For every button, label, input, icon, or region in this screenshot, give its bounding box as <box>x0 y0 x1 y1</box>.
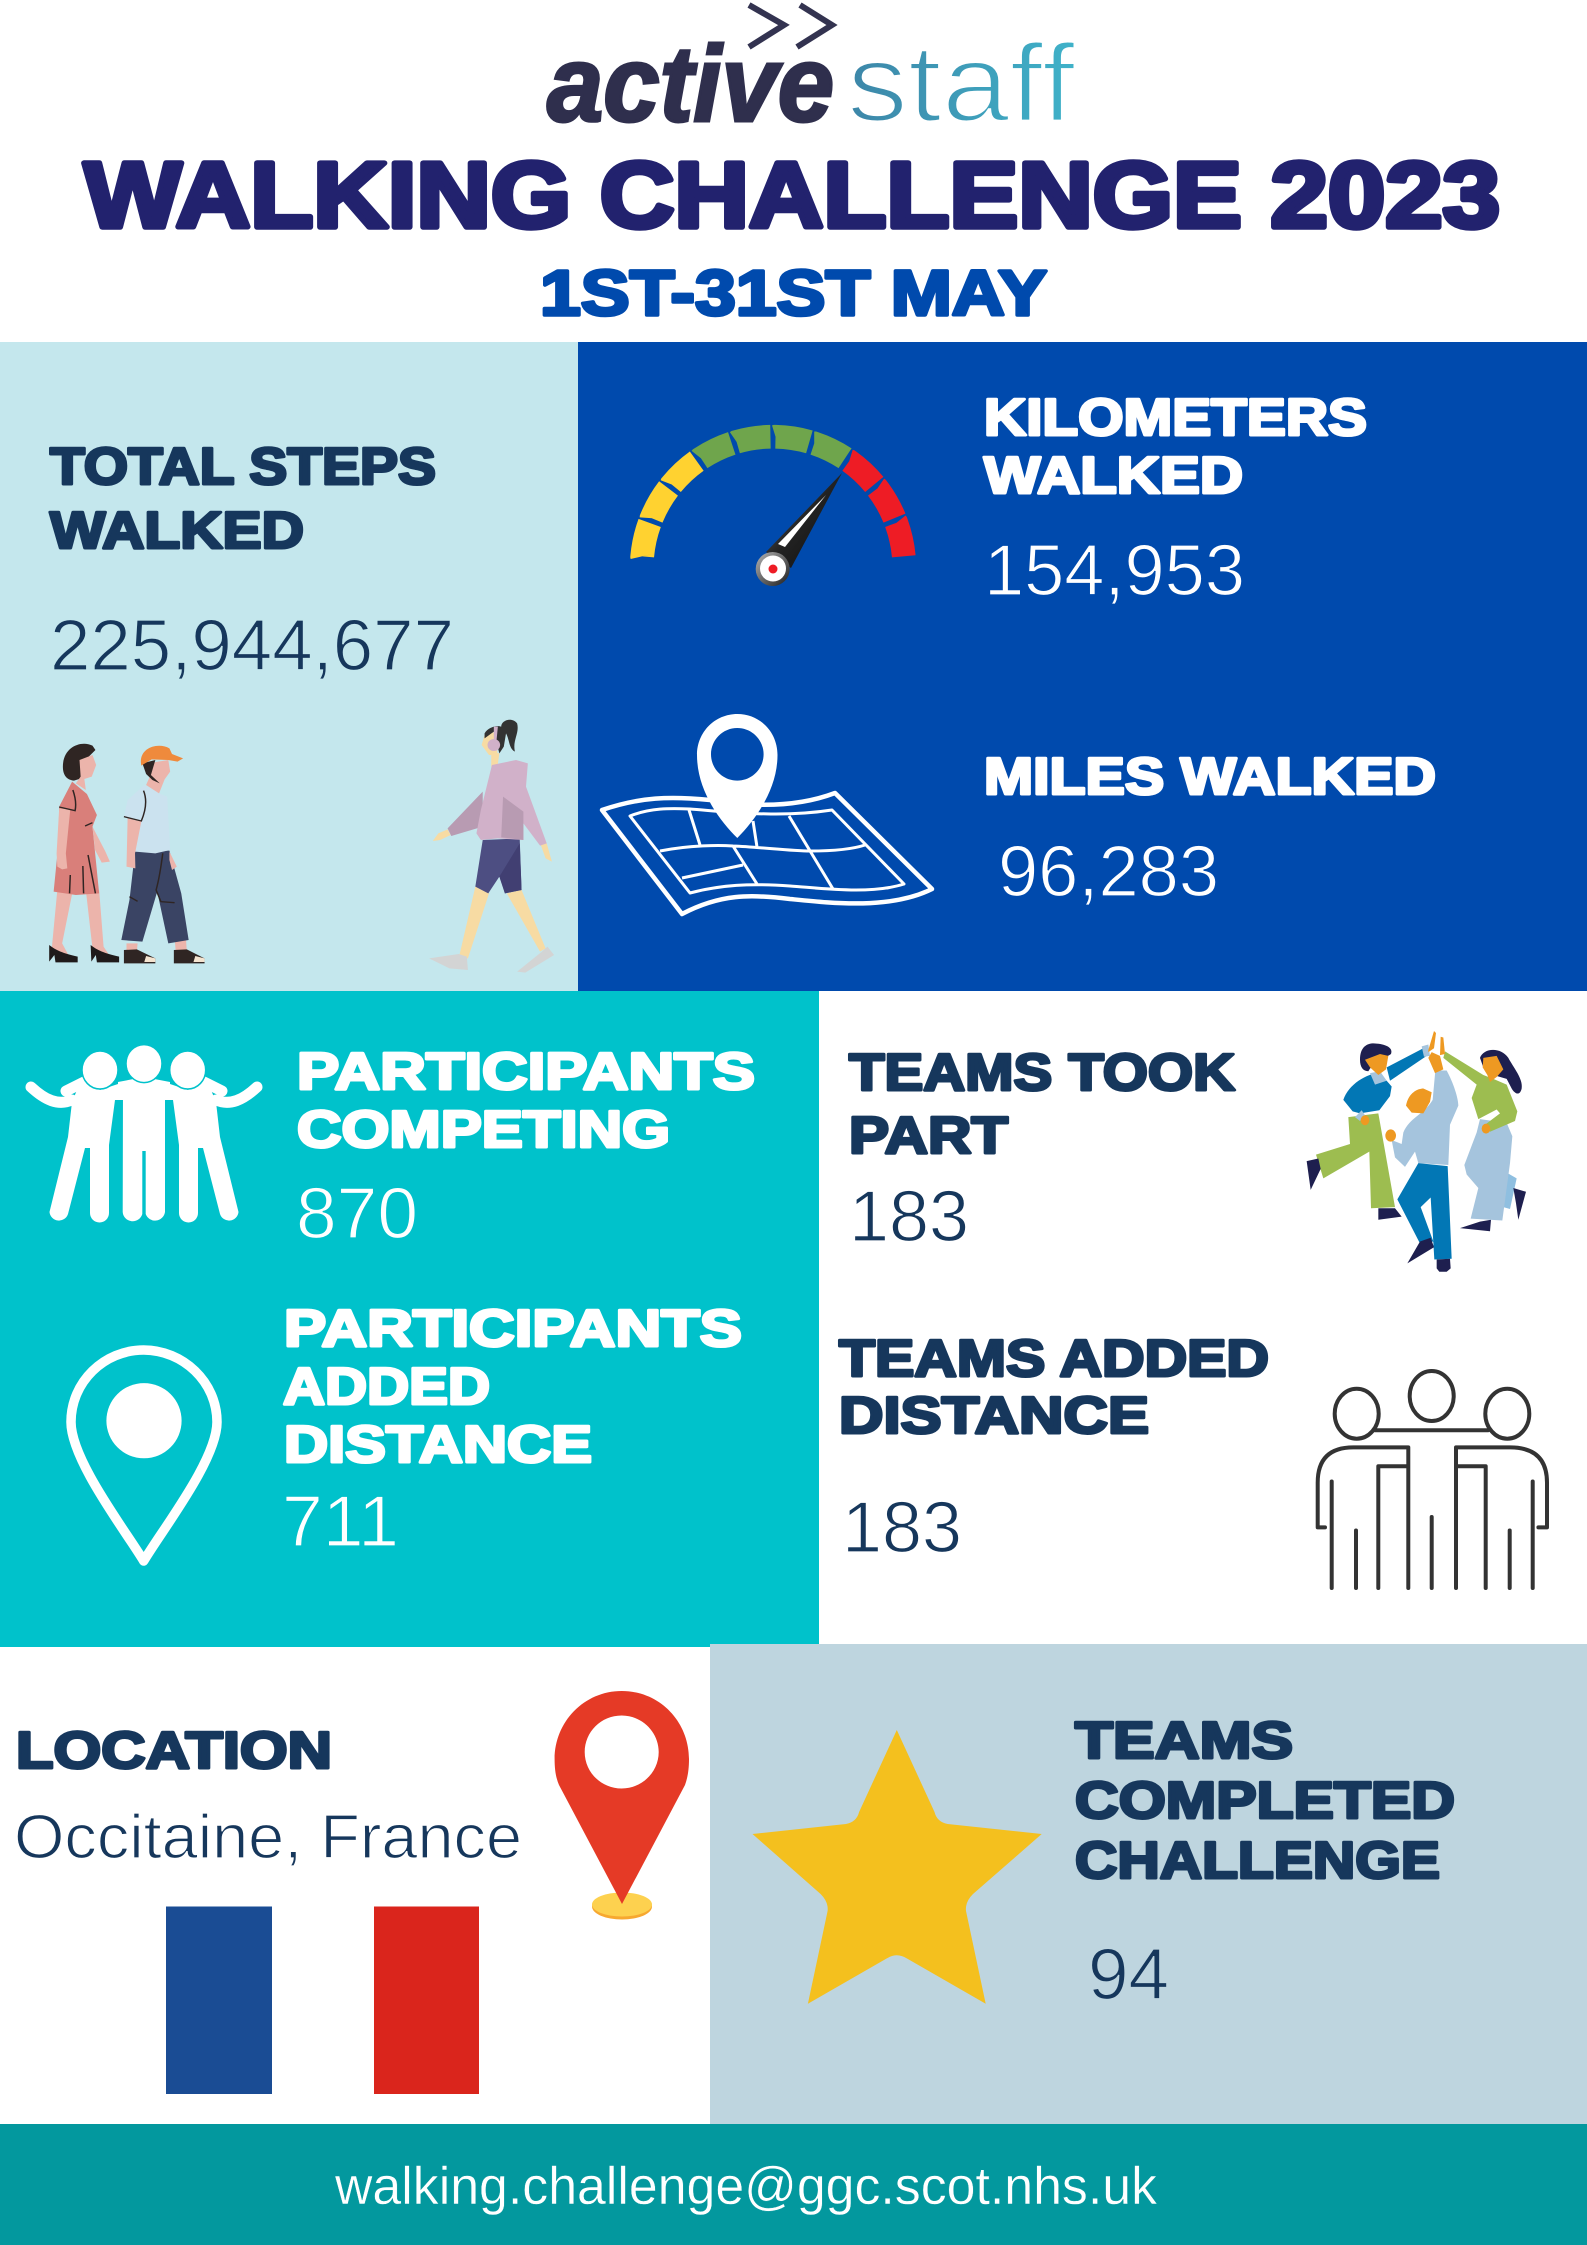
logo: active staff <box>547 5 1075 145</box>
value: teams took part: 183 <box>849 1177 969 1257</box>
heading: participants competing: PARTICIPANTS <box>297 1043 755 1101</box>
icon: speedometer gauge <box>588 383 958 753</box>
heading: total steps walked <box>50 438 436 560</box>
logo: active staff: active <box>547 23 834 144</box>
value: teams added distance: 183 <box>842 1488 962 1568</box>
icon: group of three people <box>31 1045 257 1222</box>
title: WALKING CHALLENGE 2023 <box>84 143 1500 247</box>
illustration: walkers <box>49 720 554 973</box>
value: participants competing: 870 <box>296 1174 418 1254</box>
heading: kilometers walked: WALKED <box>984 447 1243 505</box>
value: miles: 96,283 <box>998 832 1219 912</box>
panel: total steps <box>0 342 578 991</box>
heading: participants added distance: ADDED <box>283 1358 490 1416</box>
panel: teams completed <box>710 1644 1587 2124</box>
heading: teams added distance <box>839 1330 1269 1445</box>
panel: distance <box>578 342 1587 991</box>
heading: participants added distance: PARTICIPANTS <box>284 1300 742 1358</box>
icon: yellow star <box>752 1730 1042 2004</box>
heading: participants added distance: DISTANCE <box>284 1416 592 1474</box>
heading: participants competing: COMPETING <box>297 1101 670 1159</box>
heading: teams took part <box>849 1044 1235 1165</box>
heading: participants added distance <box>283 1300 742 1474</box>
footer email: walking.challenge@ggc.scot.nhs.uk <box>334 2157 1157 2216</box>
heading: teams completed challenge: COMPLETED <box>1075 1772 1455 1830</box>
icon: red map pin <box>555 1691 689 1920</box>
heading: kilometers walked: KILOMETERS <box>984 389 1367 447</box>
heading: teams took part: PART <box>849 1107 1008 1165</box>
heading: location: LOCATION <box>16 1722 332 1780</box>
footer <box>0 2124 1587 2245</box>
heading: total steps walked: WALKED <box>50 502 304 560</box>
illustration: team high five <box>1307 1031 1526 1272</box>
icon: french flag <box>166 1906 479 2094</box>
heading: total steps walked: TOTAL STEPS <box>50 438 436 496</box>
heading: teams added distance: TEAMS ADDED <box>839 1330 1269 1388</box>
value: kilometers: 154,953 <box>984 531 1245 611</box>
value: location name: Occitaine, France <box>14 1803 522 1872</box>
value: teams completed: 94 <box>1088 1935 1169 2015</box>
icon: outline location pin <box>71 1350 217 1561</box>
panel: participants <box>0 991 819 1647</box>
icon: map with pin <box>602 714 932 914</box>
logo: active staff: staff <box>847 22 1075 145</box>
value: participants added distance: 711 <box>282 1482 399 1562</box>
header <box>0 0 1587 342</box>
panel: teams <box>819 991 1587 1644</box>
heading: teams added distance: DISTANCE <box>839 1387 1149 1445</box>
heading: kilometers walked <box>984 389 1367 505</box>
heading: teams completed challenge: CHALLENGE <box>1075 1832 1440 1890</box>
value: total steps: 225,944,677 <box>50 606 454 686</box>
heading: teams completed challenge <box>1075 1712 1455 1890</box>
panel: location <box>0 1647 710 2124</box>
heading: participants competing <box>297 1043 755 1159</box>
heading: teams completed challenge: TEAMS <box>1075 1712 1293 1770</box>
icon: team outline <box>1318 1371 1547 1588</box>
subtitle: dates: 1ST-31ST MAY <box>540 257 1047 329</box>
heading: miles walked: MILES WALKED <box>984 748 1436 806</box>
heading: teams took part: TEAMS TOOK <box>849 1044 1235 1102</box>
